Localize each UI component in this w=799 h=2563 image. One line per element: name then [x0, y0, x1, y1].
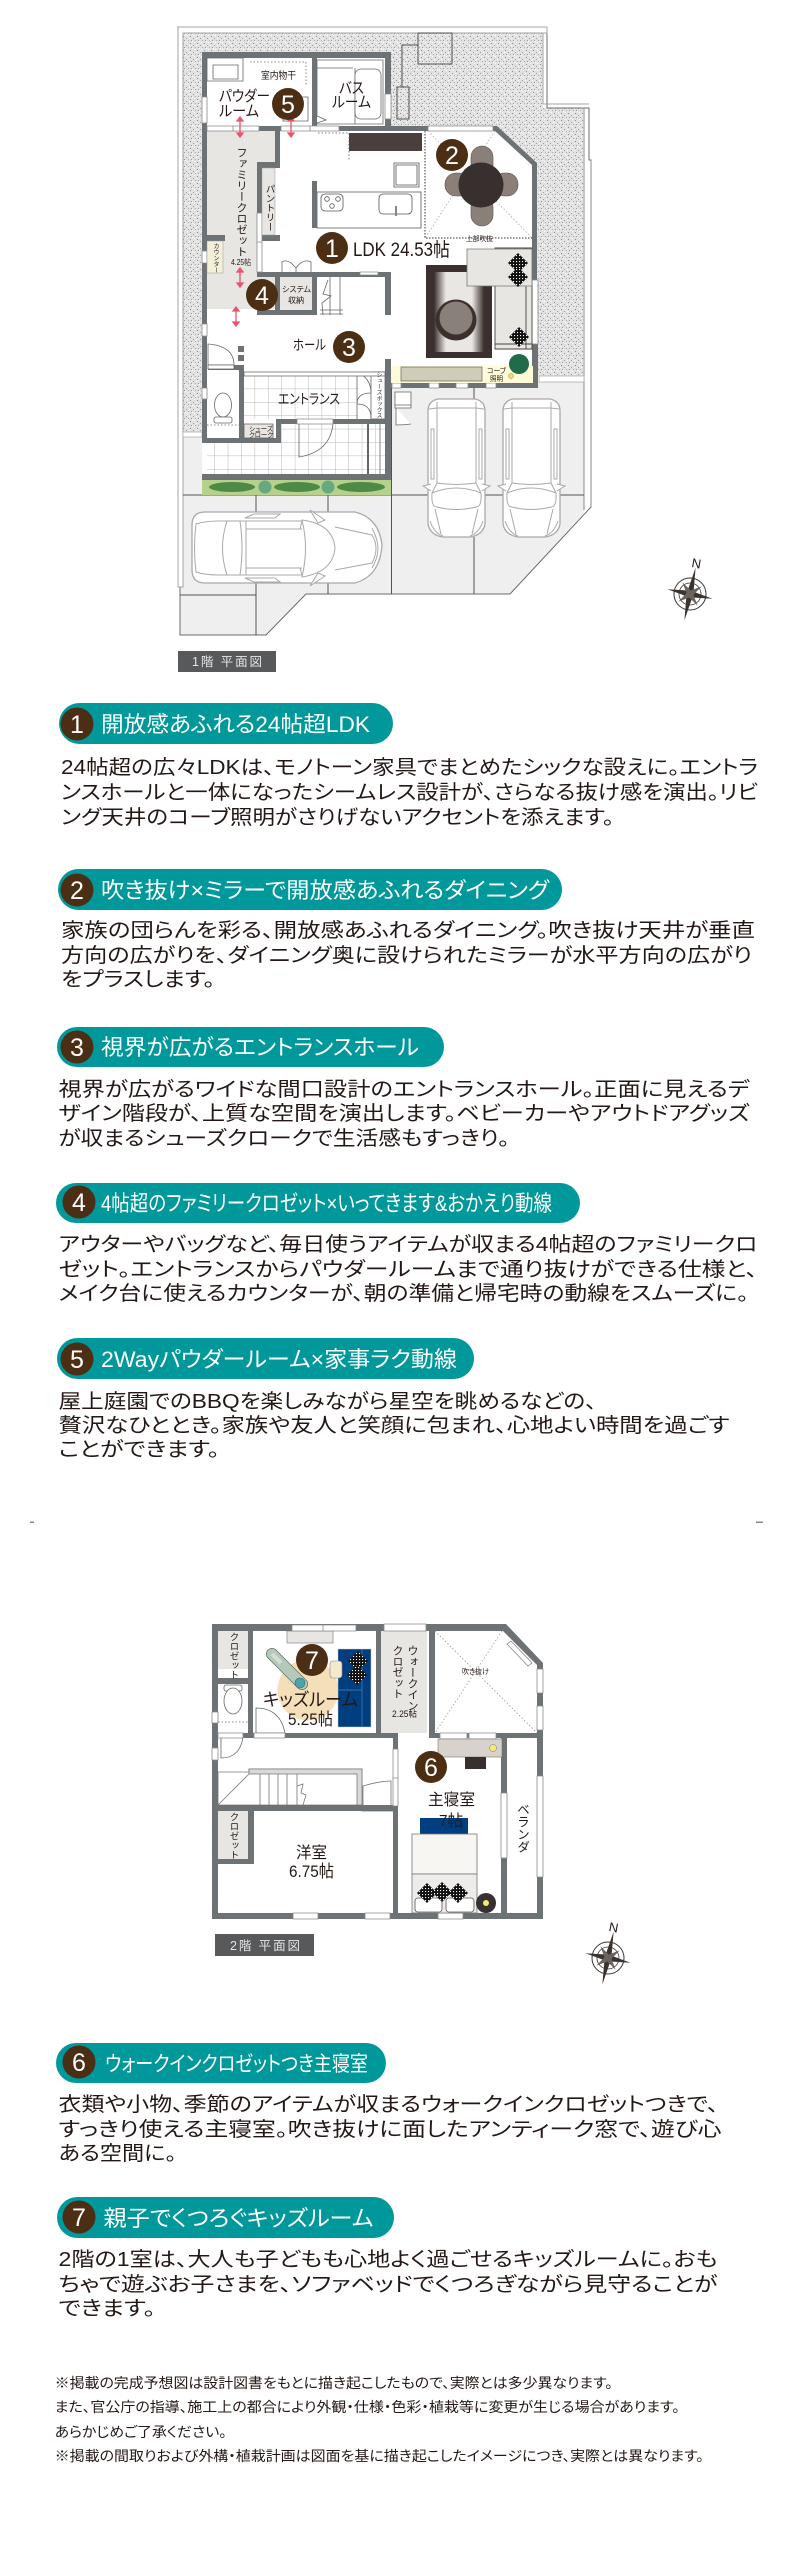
first floor plan tag [178, 651, 276, 672]
room labels first floor [212, 69, 506, 439]
heading 4: 4 [72, 1189, 86, 1217]
kids room furniture [272, 1631, 371, 1727]
walls [202, 52, 538, 480]
room labels first floor: ルーム [331, 94, 371, 111]
feature 3 [57, 1027, 751, 1150]
room labels first floor: クローク [249, 431, 273, 439]
room labels first floor: シューズ [249, 424, 274, 433]
number markers first floor: 1 [325, 235, 339, 263]
room labels first floor: 室内物干 [261, 69, 296, 82]
room labels first floor: ホール [293, 337, 326, 353]
body 7: 2階の1室は、大人も子どもも心地よく過ごせるキッズルームに。おも [58, 2248, 718, 2271]
storage [280, 277, 312, 310]
room labels second floor [228, 1632, 529, 1881]
body 1: 24帖超の広々LDKは、モノトーン家具でまとめたシックな設えに。エントラ [61, 756, 758, 779]
first floor plan tag: 1階 平面図 [192, 655, 262, 669]
feature 7 [57, 2197, 718, 2320]
heading 5: 2Wayパウダールーム×家事ラク動線 [101, 1347, 457, 1372]
body 4: メイク台に使えるカウンターが、朝の準備と帰宅時の動線をスムーズに。 [58, 1282, 748, 1305]
heading 2 [58, 869, 562, 910]
counter [207, 241, 223, 273]
compass second floor: N [608, 1919, 620, 1936]
heading 4 [56, 1183, 580, 1223]
body 2: をプラスします。 [61, 969, 215, 991]
compass first floor [662, 555, 718, 625]
room labels second floor: 主寝室 [428, 1791, 475, 1809]
footnotes: ※掲載の間取りおよび外構・植栽計画は図面を基に描き起こしたイメージにつき、実際とは異なります。 [55, 2448, 704, 2464]
room labels second floor: 2.25帖 [392, 1708, 417, 1719]
WC [207, 344, 239, 425]
heading 7: 親子でくつろぐキッズルーム [104, 2206, 374, 2231]
section tick marks [30, 1522, 763, 1523]
room labels second floor: キッズルーム [263, 1690, 358, 1710]
body 3 [58, 1078, 751, 1150]
body 4: アウターやバッグなど、毎日使うアイテムが収まる4帖超のファミリークロ [58, 1233, 758, 1256]
body 5 [58, 1390, 730, 1461]
body 3: が収まるシューズクロークで生活感もすっきり。 [58, 1127, 510, 1150]
room labels second floor: ベランダ [515, 1803, 529, 1853]
room labels first floor: 上部吹抜 [466, 234, 493, 243]
feature 4 [56, 1183, 758, 1305]
footnotes: ※掲載の完成予想図は設計図書をもとに描き起こしたもので、実際とは多少異なります。 [55, 2375, 613, 2391]
windows and doors [202, 94, 538, 424]
windows second floor [212, 1624, 543, 1919]
room labels first floor: コーブ [487, 366, 506, 375]
room labels second floor: クロゼット [391, 1645, 403, 1699]
living room rug and sofa [426, 248, 532, 358]
number markers first floor: 3 [342, 334, 356, 362]
heading 1 [59, 703, 393, 744]
room labels second floor: ウォークイン [406, 1645, 418, 1711]
body 7: できます。 [58, 2298, 156, 2320]
master bedroom furniture [412, 1739, 502, 1913]
room labels second floor: 6.75帖 [289, 1862, 334, 1881]
parked cars [192, 399, 565, 586]
body 6: ある空間に。 [58, 2142, 176, 2165]
stairs [282, 261, 352, 315]
body 3: ザイン階段が、上質な空間を演出します。ベビーカーやアウトドアグッズ [58, 1102, 751, 1125]
entrance tiles [207, 376, 391, 474]
heading 6 [56, 2043, 386, 2083]
body 1: ンスホールと一体になったシームレス設計が、さらなる抜け感を演出。リビ [61, 781, 758, 804]
void diagonals [435, 1631, 537, 1733]
room labels first floor: 収納 [288, 295, 304, 305]
number markers first floor: 5 [281, 91, 295, 119]
second floor footprint [212, 1624, 543, 1919]
heading 1: 1 [70, 711, 84, 739]
heading 5 [57, 1338, 474, 1379]
heading 4: 4帖超のファミリークロゼット×いってきます&おかえり動線 [101, 1191, 552, 1216]
heading 5: 5 [70, 1346, 84, 1374]
body 4: ゼット。エントランスからパウダールームまで通り抜けができる仕様と、 [58, 1258, 758, 1281]
room labels first floor: ルーム [218, 103, 259, 120]
room labels first floor: パントリー [264, 184, 275, 232]
kitchen [312, 133, 422, 228]
family closet floor [207, 131, 275, 309]
room labels first floor: 4.25帖 [231, 257, 251, 267]
heading 3: 3 [70, 1034, 84, 1062]
feature 1 [59, 703, 758, 829]
heading 6: ウォークインクロゼットつき主寝室 [105, 2053, 368, 2076]
horizontal car [192, 510, 382, 586]
feature 2 [58, 869, 755, 991]
number markers second floor: 7 [305, 1647, 319, 1675]
body 5: ことができます。 [58, 1438, 220, 1461]
heading 2: 吹き抜け×ミラーで開放感あふれるダイニング [101, 878, 551, 903]
footnotes: あらかじめご了承ください。 [55, 2424, 227, 2440]
body 2: 家族の団らんを彩る、開放感あふれるダイニング。吹き抜け天井が垂直 [61, 919, 755, 942]
room labels first floor: バス [339, 80, 364, 97]
heading 6: 6 [72, 2049, 86, 2077]
body 1 [61, 756, 758, 829]
body 5: 屋上庭園でのBBQを楽しみながら星空を眺めるなどの、 [58, 1390, 596, 1413]
footnotes: また、官公庁の指導、施工上の都合により外観・仕様・色彩・植栽等に変更が生じる場合があります。 [55, 2399, 680, 2415]
room labels second floor: 7帖 [439, 1812, 463, 1830]
dining set [425, 131, 532, 238]
room labels first floor: シューズボックス [375, 372, 382, 419]
number markers first floor: 4 [255, 282, 269, 310]
room labels first floor: カウンター [212, 243, 219, 273]
shoe storage [244, 372, 411, 474]
heading 1: 開放感あふれる24帖超LDK [101, 712, 370, 737]
body 4 [58, 1233, 758, 1305]
feature 5 [57, 1338, 730, 1461]
footnotes [55, 2375, 704, 2464]
heading 3: 視界が広がるエントランスホール [101, 1035, 419, 1060]
body 6: すっきり使える主寝室。吹き抜けに面したアンティーク窓で、遊び心 [58, 2118, 721, 2141]
room labels first floor: ファミリークロゼット [235, 147, 248, 257]
heading 2: 2 [70, 877, 84, 905]
walls second floor [212, 1624, 543, 1919]
compass first floor: N [691, 555, 702, 572]
pantry [262, 168, 275, 235]
body 7 [58, 2248, 718, 2320]
site outline and driveway [177, 27, 591, 635]
body 1: ング天井のコーブ照明がさりげないアクセントを添えます。 [61, 805, 614, 829]
body 6: 衣類や小物、季節のアイテムが収まるウォークインクロゼットつきで、 [58, 2093, 719, 2116]
heading 3 [57, 1027, 444, 1067]
heading 7 [57, 2197, 394, 2238]
room labels second floor: クロゼット [228, 1632, 239, 1680]
second floor plan tag: 2階 平面図 [230, 1939, 300, 1953]
number markers second floor: 6 [424, 1754, 438, 1782]
heading 7: 7 [72, 2204, 86, 2232]
compass second floor [580, 1919, 636, 1989]
room labels second floor: 5.25帖 [288, 1710, 333, 1729]
WC [218, 1685, 285, 1758]
feature 6 [56, 2043, 722, 2165]
room labels first floor: LDK 24.53帖 [353, 239, 450, 261]
first floor plan [177, 27, 718, 672]
second floor plan tag [215, 1934, 314, 1956]
TV board and plant [391, 354, 533, 383]
body 6 [58, 2093, 721, 2165]
closets floors [218, 1631, 427, 1859]
body 2 [61, 919, 755, 991]
room labels first floor: パウダー [219, 88, 270, 105]
powder room and bath fixtures [207, 58, 383, 124]
stairs second floor [218, 1769, 393, 1811]
body 7: ちゃで遊ぶお子さまを、ソファベッドでくつろぎながら見守ることが [58, 2273, 718, 2296]
planting strip [202, 479, 391, 495]
room labels second floor: 吹き抜け [462, 1666, 489, 1676]
room labels first floor: エントランス [278, 391, 340, 407]
room labels first floor: 照明 [490, 375, 503, 383]
number markers first floor: 2 [445, 142, 459, 170]
building floor [202, 52, 537, 476]
second floor plan [212, 1624, 636, 1989]
room labels first floor: システム [282, 285, 311, 294]
body 2: 方向の広がりを、ダイニング奥に設けられたミラーが水平方向の広がり [61, 944, 752, 967]
number markers first floor [246, 88, 468, 363]
family circulation arrows [233, 117, 294, 326]
body 5: 贅沢なひととき。家族や友人と笑顔に包まれ、心地よい時間を過ごす [58, 1414, 730, 1437]
number markers second floor [296, 1644, 447, 1783]
room labels second floor: クロゼット [228, 1812, 239, 1860]
room labels second floor: 洋室 [296, 1844, 327, 1862]
body 3: 視界が広がるワイドな間口設計のエントランスホール。正面に見えるデ [58, 1078, 750, 1101]
